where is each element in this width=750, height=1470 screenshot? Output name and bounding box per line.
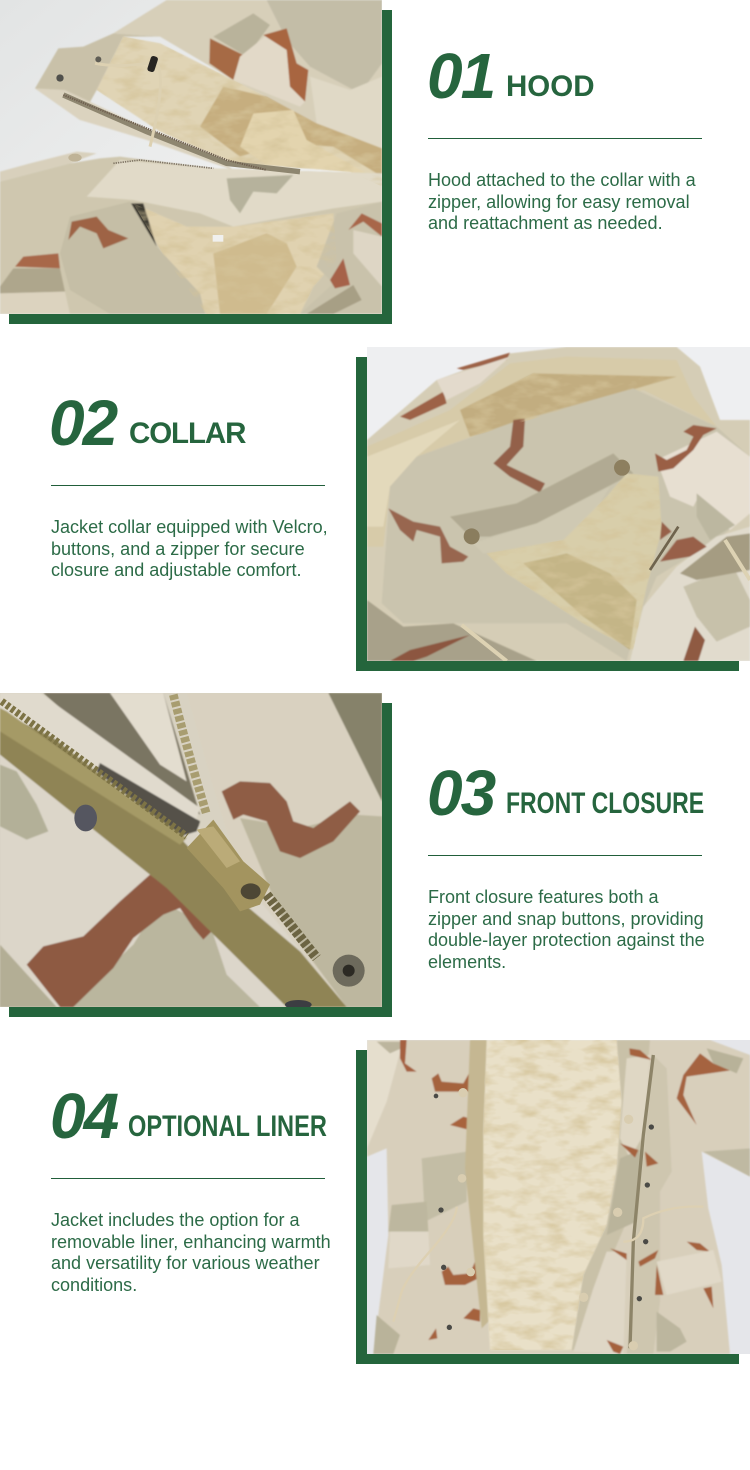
text: collar description: closure and adjustable comfort. [51, 560, 302, 580]
text: optional liner description [51, 1210, 331, 1294]
heading: 03 front closure: FRONT CLOSURE [506, 787, 704, 820]
text: collar description [51, 517, 328, 580]
text: front closure description: Front closure features both a [428, 887, 659, 907]
text: front closure description: elements. [428, 952, 506, 972]
panel: front closure [0, 693, 705, 1017]
heading: 01 hood: 01 [427, 40, 494, 112]
photo: open jacket with removable liner [367, 1040, 750, 1354]
heading: 01 hood [427, 40, 594, 112]
divider [51, 1178, 325, 1179]
text: hood description: and reattachment as needed. [428, 213, 663, 233]
heading: 02 collar: 02 [49, 387, 116, 459]
green offset frame: collar [356, 357, 739, 671]
heading: 02 collar: COLLAR [129, 417, 245, 450]
text: front closure description [428, 887, 705, 972]
heading: 01 hood: HOOD [506, 70, 594, 103]
divider [428, 138, 702, 139]
heading: 04 optional liner: 04 [50, 1080, 117, 1152]
heading: 04 optional liner [50, 1080, 327, 1152]
green offset frame: front closure [9, 703, 392, 1017]
text: hood description: zipper, allowing for easy removal [428, 192, 690, 212]
text: collar description: Jacket collar equipped with Velcro, [51, 517, 328, 537]
green offset frame: hood [9, 10, 392, 324]
photo: hood with fur lining and zipper [0, 0, 382, 314]
text: front closure description: double-layer protection against the [428, 930, 705, 950]
heading: 03 front closure: 03 [427, 757, 494, 829]
text: hood description: Hood attached to the collar with a [428, 170, 696, 190]
panel: collar [49, 347, 750, 671]
divider [51, 485, 325, 486]
text: optional liner description: removable liner, enhancing warmth [51, 1232, 331, 1252]
panel: hood [0, 0, 702, 324]
text: optional liner description: Jacket includes the option for a [51, 1210, 300, 1230]
panel: optional liner [50, 1040, 750, 1364]
green offset frame: optional liner [356, 1050, 739, 1364]
photo: collar with buttons [367, 347, 750, 661]
text: hood description [428, 170, 696, 233]
heading: 04 optional liner: OPTIONAL LINER [128, 1110, 327, 1143]
text: front closure description: zipper and snap buttons, providing [428, 908, 704, 928]
text: collar description: buttons, and a zipper for secure [51, 538, 305, 558]
heading: 02 collar [49, 387, 246, 459]
heading: 03 front closure [427, 757, 704, 829]
text: optional liner description: conditions. [51, 1274, 137, 1294]
divider [428, 855, 702, 856]
photo: zipper and snap buttons [0, 693, 382, 1007]
text: optional liner description: and versatility for various weather [51, 1253, 320, 1273]
